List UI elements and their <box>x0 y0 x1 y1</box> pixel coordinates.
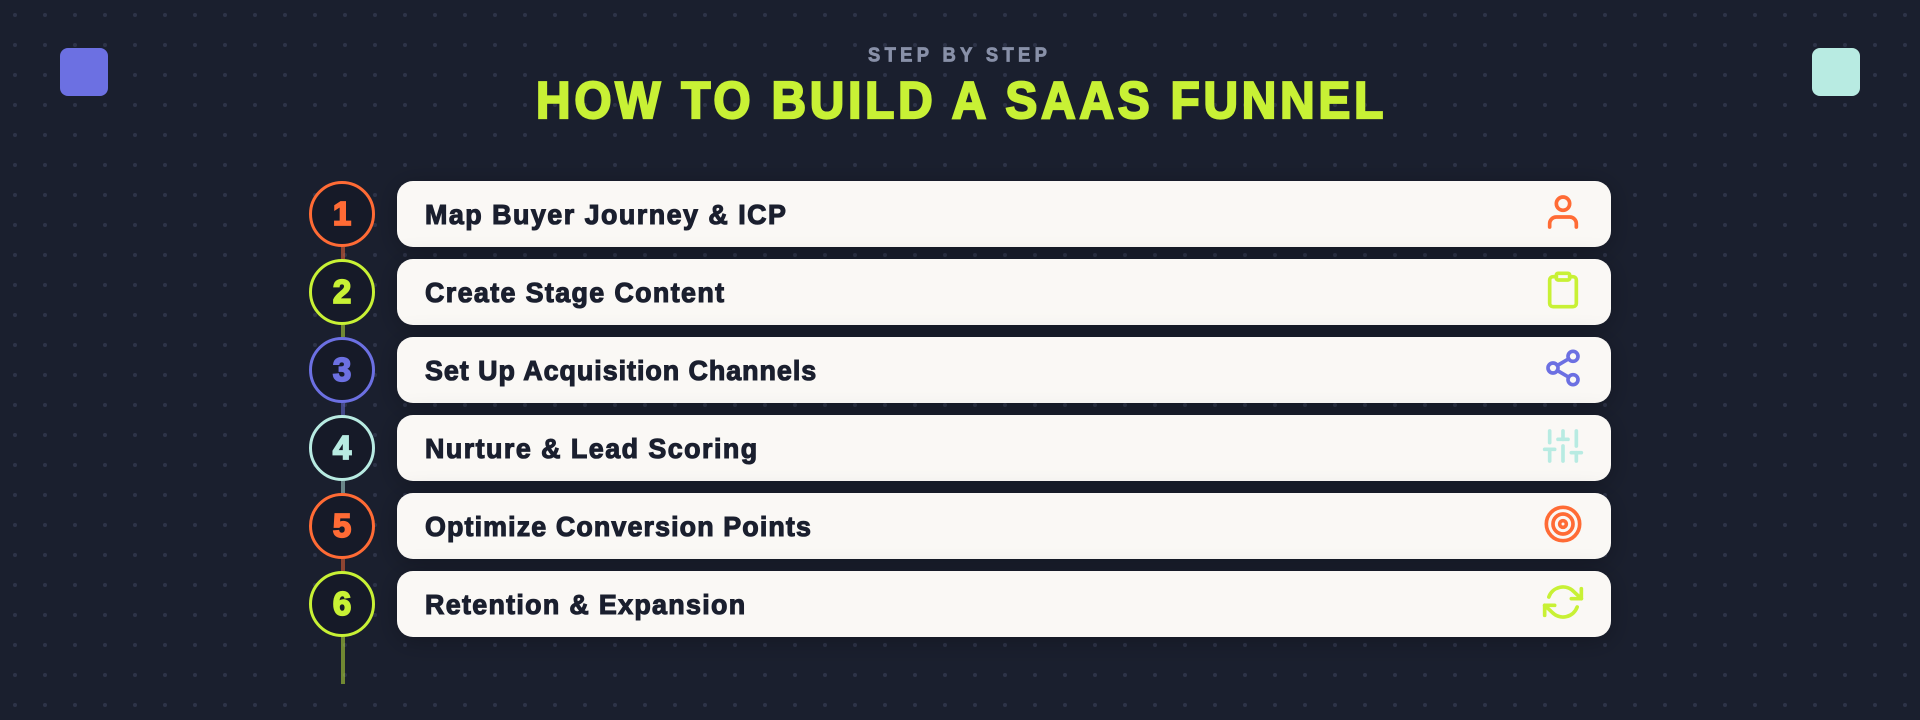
step 4 number badge: 4 <box>333 429 352 466</box>
step 4 label: Nurture & Lead Scoring <box>425 432 757 464</box>
step 4 <box>310 415 1611 493</box>
step 3 connector <box>341 403 345 415</box>
step 1 card <box>397 181 1611 247</box>
step 4 connector <box>341 481 345 493</box>
step 1 <box>310 181 1611 259</box>
step 5 number badge: 5 <box>333 507 351 544</box>
step 6 <box>310 571 1611 684</box>
step 4 card <box>397 415 1611 481</box>
step 1 label: Map Buyer Journey & ICP <box>425 198 786 230</box>
step 6 number badge <box>310 572 374 636</box>
step 5 label: Optimize Conversion Points <box>425 510 811 542</box>
step 5 <box>310 493 1611 571</box>
icon: clipboard <box>1550 273 1576 307</box>
icon: share <box>1548 351 1578 385</box>
step 2 <box>310 259 1611 337</box>
step 2 number badge <box>310 260 374 324</box>
step 3 <box>310 337 1611 415</box>
step 3 card <box>397 337 1611 403</box>
eyebrow heading: STEP BY STEP <box>868 45 1047 67</box>
icon: user <box>1550 197 1576 227</box>
step 2 connector <box>341 325 345 337</box>
icon: target <box>1546 507 1580 541</box>
step 6 label: Retention & Expansion <box>425 588 745 620</box>
step 3 number badge: 3 <box>333 351 351 388</box>
step 2 number badge: 2 <box>333 273 351 310</box>
step 4 number badge <box>310 416 374 480</box>
step 6 number badge: 6 <box>333 585 351 622</box>
step 5 number badge <box>310 494 374 558</box>
icon: sliders <box>1545 431 1581 461</box>
decorative square: purple <box>60 48 108 96</box>
step 5 card <box>397 493 1611 559</box>
decorative square: mint <box>1812 48 1860 96</box>
step 6 card <box>397 571 1611 637</box>
step 6 connector <box>341 637 345 684</box>
step 2 card <box>397 259 1611 325</box>
step 2 label: Create Stage Content <box>425 276 724 308</box>
step 5 connector <box>341 559 345 571</box>
icon: refresh <box>1545 587 1581 617</box>
step 1 number badge <box>310 182 374 246</box>
step 3 number badge <box>310 338 374 402</box>
step 1 number badge: 1 <box>333 195 351 232</box>
title: HOW TO BUILD A SAAS FUNNEL <box>536 71 1383 129</box>
step 1 connector <box>341 247 345 259</box>
step 3 label: Set Up Acquisition Channels <box>425 354 816 386</box>
